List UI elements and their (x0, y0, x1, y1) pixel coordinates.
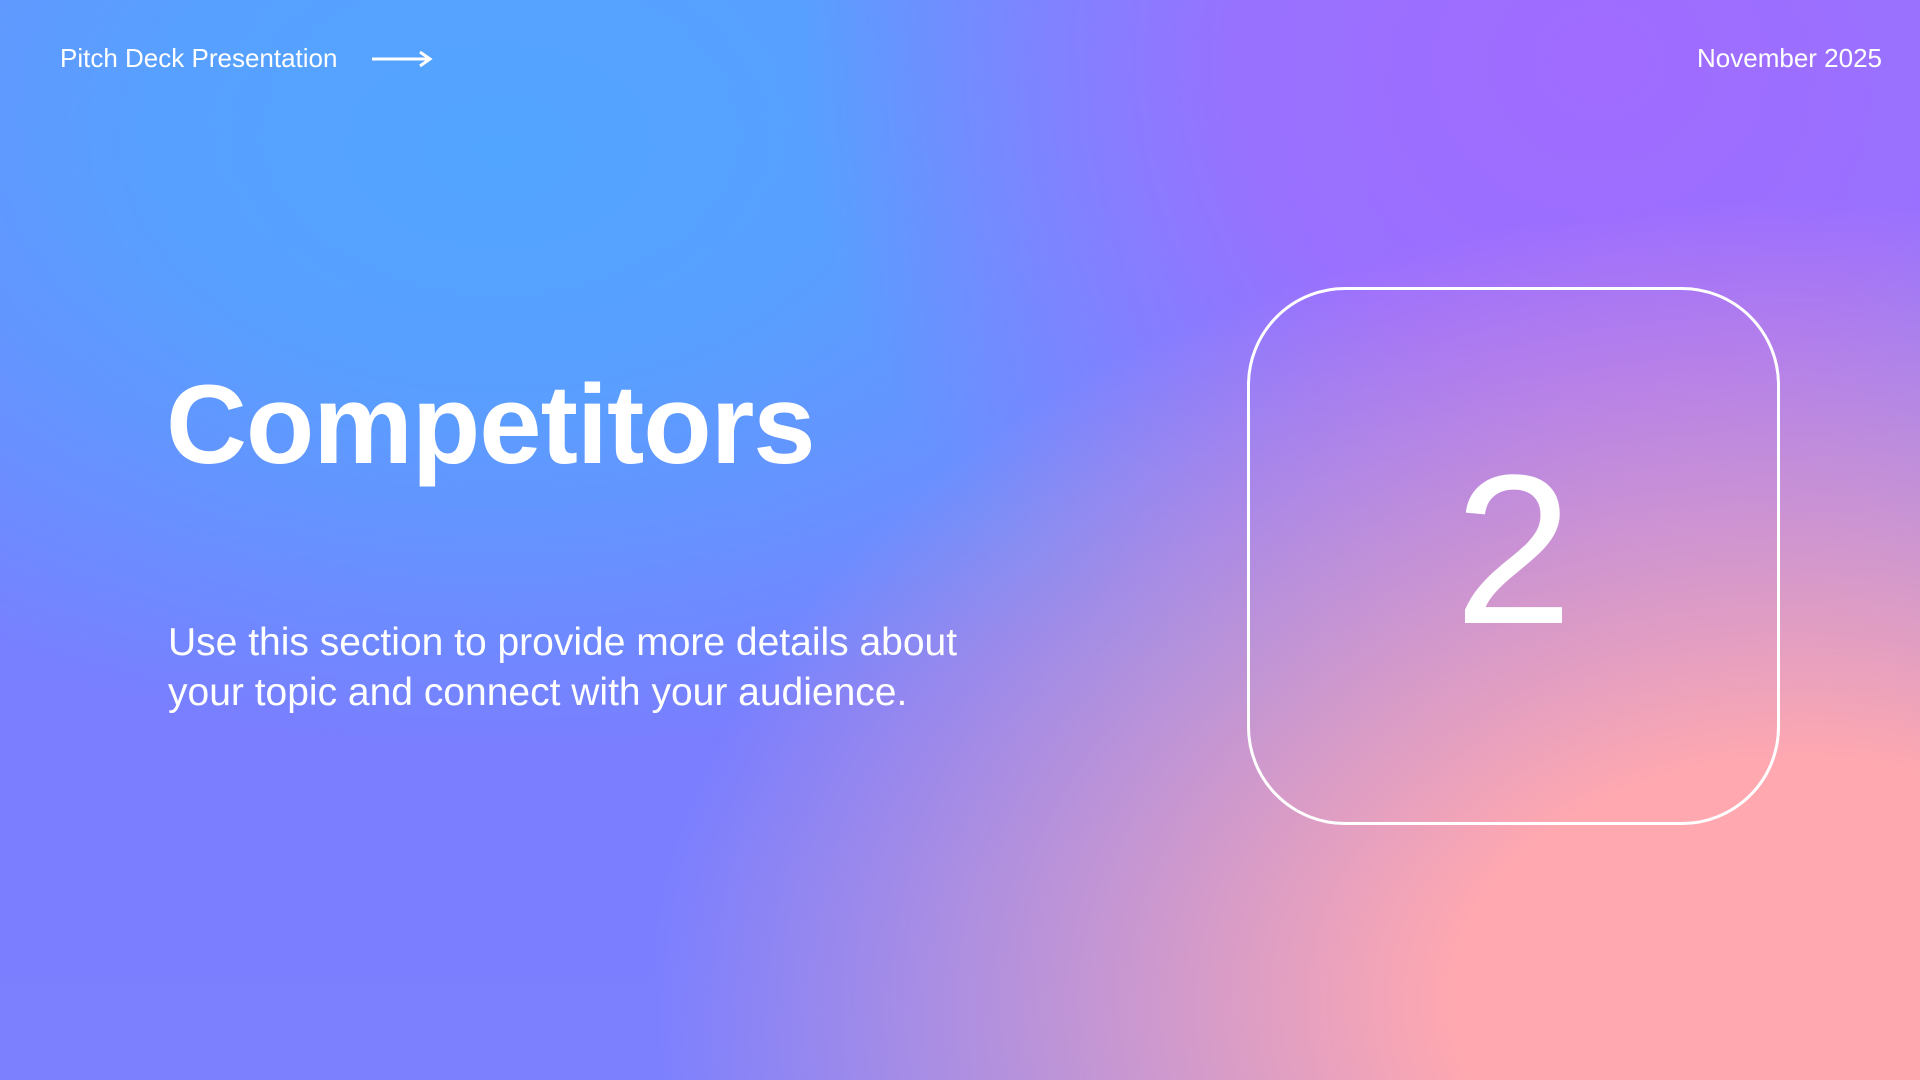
number box (1247, 287, 1780, 825)
header: deck label: Pitch Deck Presentation (60, 43, 337, 73)
header: date: November 2025 (1697, 43, 1882, 73)
body text: Use this section to provide more details about (168, 621, 957, 664)
arrow icon (372, 50, 432, 68)
body text: your topic and connect with your audience. (168, 671, 907, 714)
section number: 2 (1454, 431, 1573, 669)
title: Competitors (166, 362, 815, 487)
body text (168, 621, 957, 714)
